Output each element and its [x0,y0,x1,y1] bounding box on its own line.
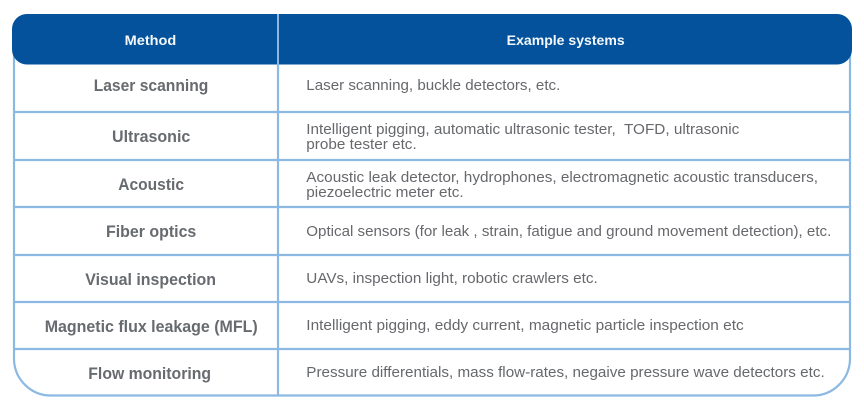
header: method: Method [125,32,176,48]
row: laser scanning [94,77,560,95]
row: fiber optics [106,223,831,241]
row: visual inspection: UAVs, inspection light, robotic crawlers etc. [306,271,598,287]
row: visual inspection [85,271,598,289]
row: fiber optics: Optical sensors (for leak , strain, fatigue and ground movement detection), etc. [306,224,831,240]
row: flow monitoring: Pressure differentials, mass flow-rates, negaive pressure wave detectors etc. [306,365,825,381]
header: example systems: Example systems [507,32,625,48]
row: laser scanning: Laser scanning [94,77,208,95]
row: fiber optics: Fiber optics [106,223,196,241]
row: acoustic: Acoustic leak detector, hydrophones, electromagnetic acoustic transducers, [306,170,818,186]
row: laser scanning: Laser scanning, buckle detectors, etc. [306,78,560,94]
row: visual inspection: Visual inspection [85,271,216,289]
row: flow monitoring: Flow monitoring [88,365,211,383]
table header [12,14,852,64]
row: magnetic flux leakage: Intelligent pigging, eddy current, magnetic particle inspection etc [306,318,744,334]
row: acoustic: Acoustic [118,176,184,194]
row: magnetic flux leakage: Magnetic flux leakage (MFL) [45,318,258,336]
row: ultrasonic [112,122,739,153]
row: flow monitoring [88,365,825,383]
row: ultrasonic: Ultrasonic [112,128,190,146]
row: ultrasonic: Intelligent pigging, automatic ultrasonic tester, TOFD, ultrasonic [306,122,739,138]
row: ultrasonic: probe tester etc. [306,137,417,153]
row: acoustic: piezoelectric meter etc. [306,185,464,201]
row: acoustic [118,170,818,201]
row: magnetic flux leakage [45,318,744,336]
